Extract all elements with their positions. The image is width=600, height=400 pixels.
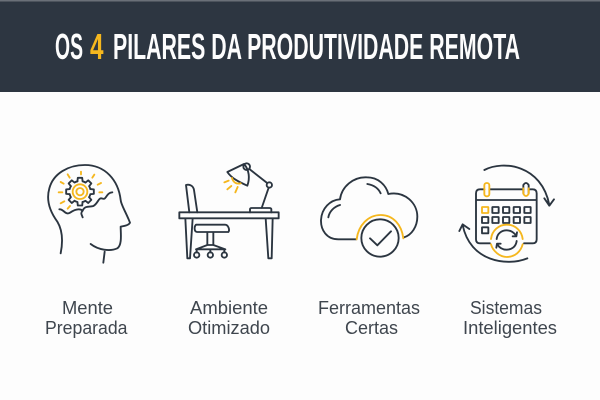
label: Ambiente Otimizado: Ambiente [190,298,268,318]
label: Ferramentas Certas: Certas [345,318,398,338]
head outline [48,165,130,253]
label: Sistemas Inteligentes [463,298,557,338]
label: Ferramentas Certas: Ferramentas [318,298,420,318]
calendar grid [482,207,531,233]
cloud [321,177,417,239]
calendar rings [484,183,489,196]
calendar body [476,189,537,243]
label: Ambiente Otimizado [188,298,270,338]
icon: calendar with cycle arrows [459,166,554,262]
icon: head with gear [48,165,130,263]
icon: cloud with check [321,177,417,257]
yellow arc [357,215,403,239]
label: Ambiente Otimizado: Otimizado [188,318,270,338]
check badge [361,219,399,257]
lamp light [224,178,241,192]
label: Mente Preparada: Preparada [45,318,128,338]
gear rays [59,172,102,209]
chair [186,185,229,252]
title: 4 [90,26,104,67]
label: Mente Preparada: Mente [62,298,113,318]
label: Sistemas Inteligentes: Sistemas [470,298,542,318]
sync badge [491,225,523,257]
desk [179,212,279,258]
label: Sistemas Inteligentes: Inteligentes [463,318,557,338]
brain squiggle [59,192,112,217]
gear [66,178,94,205]
label: Ferramentas Certas [318,298,420,338]
icon: desk with lamp and chair [179,163,279,258]
cycle arrows [459,166,554,262]
label: Mente Preparada [45,298,128,338]
title: OS [55,26,83,67]
lamp [249,169,271,212]
header banner [0,0,600,92]
neck [103,252,105,263]
